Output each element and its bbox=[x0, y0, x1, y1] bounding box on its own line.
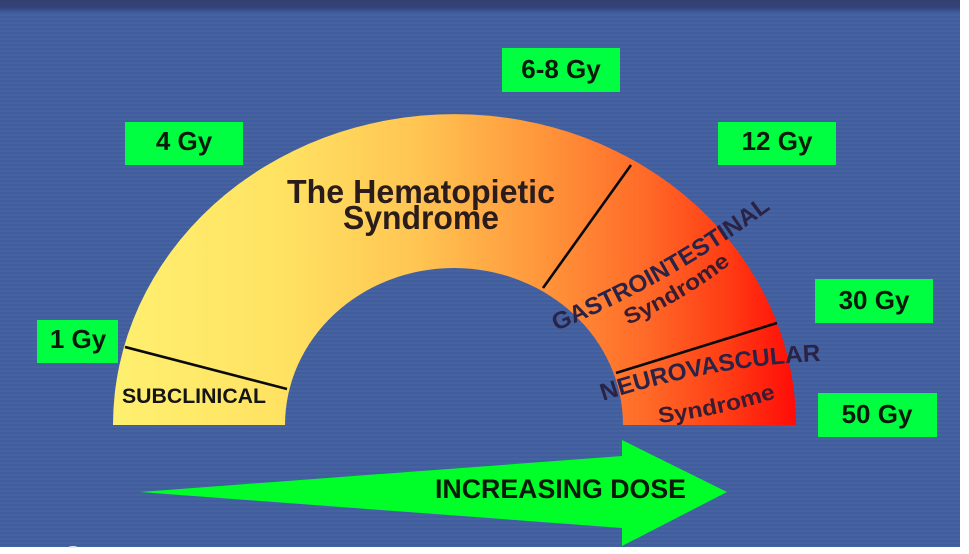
dose box: 50 Gy: 50 Gy bbox=[842, 399, 913, 429]
arrow: increasing dose bbox=[140, 440, 727, 546]
dose box: 1 Gy: 1 Gy bbox=[50, 324, 107, 354]
label: neurovascular syndrome: Syndrome bbox=[659, 388, 774, 426]
top dark band bbox=[0, 0, 960, 13]
dose box: 50 Gy bbox=[818, 393, 937, 437]
label: neurovascular syndrome: NEUROVASCULAR bbox=[600, 344, 820, 400]
label: hematopoietic syndrome bbox=[287, 173, 555, 236]
label: hematopoietic syndrome: The Hematopietic bbox=[287, 173, 555, 210]
dose box: 4 Gy: 4 Gy bbox=[156, 126, 213, 156]
label: gastrointestinal syndrome: GASTROINTESTINAL bbox=[552, 201, 770, 328]
dose box: 6-8 Gy bbox=[502, 48, 620, 92]
semicircular dose arc bbox=[113, 114, 796, 425]
dose box: 6-8 Gy: 6-8 Gy bbox=[521, 54, 601, 84]
dose box: 12 Gy: 12 Gy bbox=[742, 126, 813, 156]
small white mark at bottom edge bbox=[69, 546, 77, 548]
divider: gastrointestinal boundary bbox=[616, 323, 777, 373]
label: subclinical: SUBCLINICAL bbox=[122, 385, 266, 408]
dose box: 12 Gy bbox=[718, 122, 836, 165]
dose box: 30 Gy: 30 Gy bbox=[839, 285, 910, 315]
divider: hematopoietic boundary bbox=[543, 165, 631, 288]
divider: subclinical boundary bbox=[125, 347, 287, 389]
dose box: 4 Gy bbox=[125, 122, 243, 165]
label: hematopoietic syndrome: Syndrome bbox=[343, 199, 499, 236]
dose box: 30 Gy bbox=[815, 279, 933, 323]
label: gastrointestinal syndrome: Syndrome bbox=[624, 257, 728, 323]
dose box: 1 Gy bbox=[37, 320, 118, 363]
arrow: increasing dose: INCREASING DOSE bbox=[435, 474, 686, 504]
